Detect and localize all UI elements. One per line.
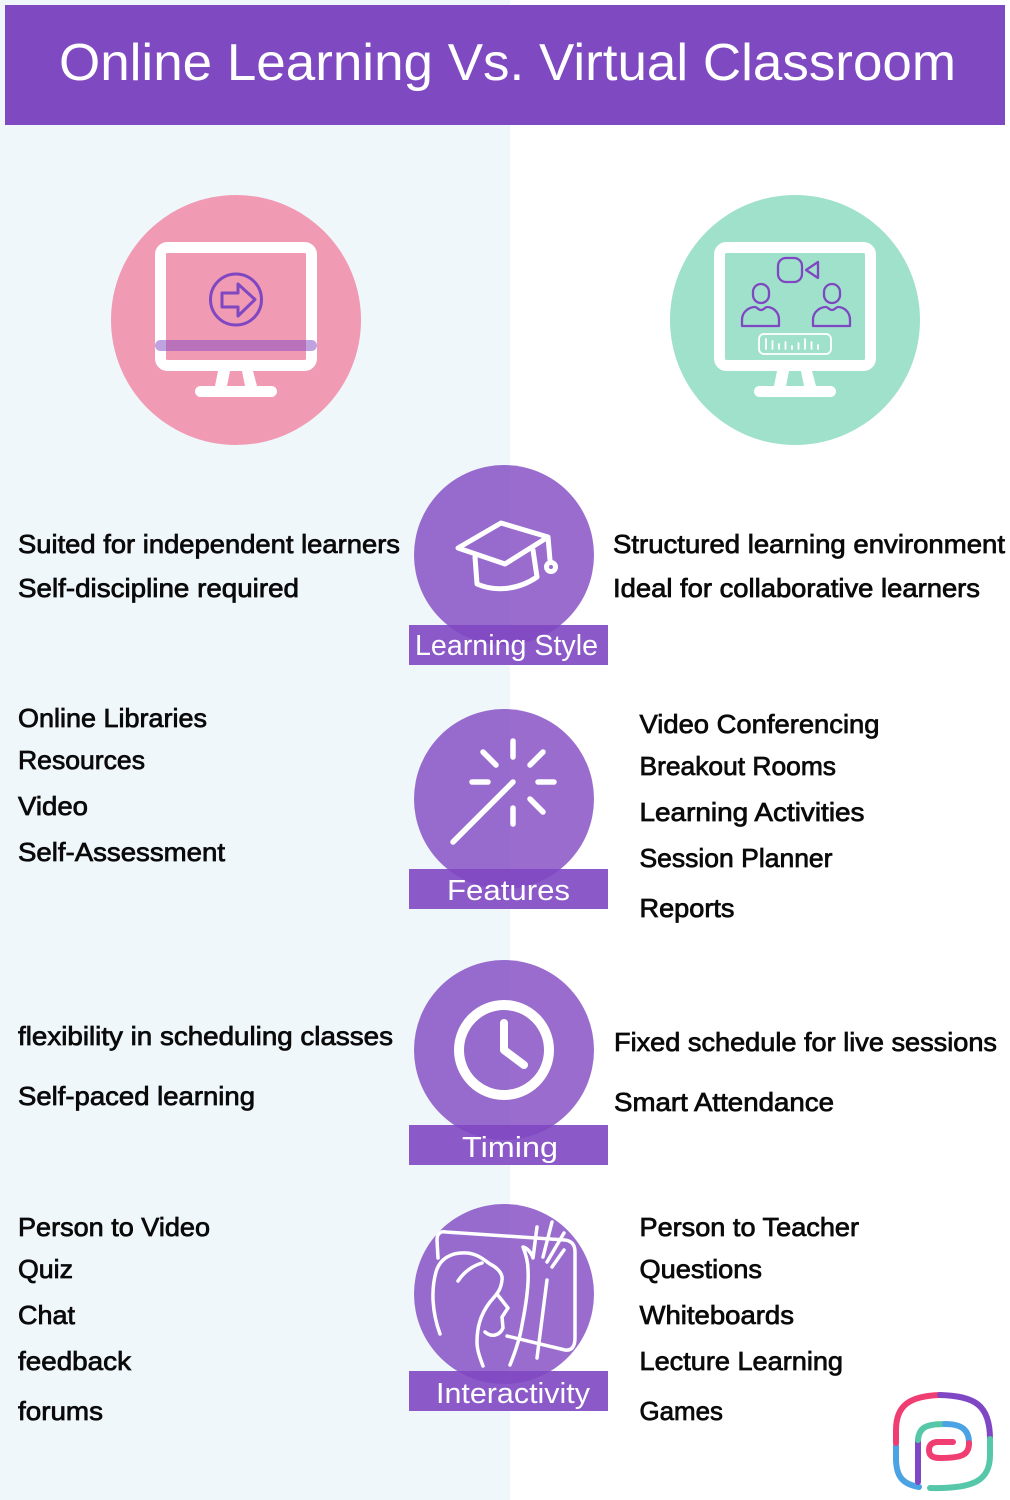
- logo: [896, 1395, 990, 1488]
- icon: person at whiteboard: [433, 1222, 575, 1366]
- row: interactivity left text: Person to Video: [18, 1212, 210, 1242]
- row: features right text: Session Planner: [640, 843, 833, 873]
- row: interactivity right text: Person to Teacher: [640, 1212, 859, 1242]
- row: timing right text: [614, 1027, 997, 1117]
- row: features right text: Learning Activities: [640, 797, 864, 827]
- row: learning style left text: [18, 529, 400, 603]
- icon: magic wand: [453, 741, 554, 842]
- row: interactivity right text: Questions: [640, 1254, 762, 1284]
- row: features right text: Breakout Rooms: [640, 751, 836, 781]
- title banner: [5, 5, 1005, 125]
- row: learning style left text: Suited for independent learners: [18, 529, 400, 559]
- title banner: Online Learning Vs. Virtual Classroom: [59, 34, 956, 92]
- row: learning style badge: Learning Style: [415, 630, 598, 662]
- row: features right text: Video Conferencing: [640, 709, 880, 739]
- row: interactivity right text: Lecture Learning: [640, 1346, 843, 1376]
- row: timing right text: Fixed schedule for live sessions: [614, 1027, 997, 1057]
- row: interactivity right text: Games: [640, 1396, 723, 1426]
- row: features right text: Reports: [640, 893, 734, 923]
- row: features left text: Online Libraries: [18, 703, 207, 733]
- row: learning style left text: Self-discipline required: [18, 573, 299, 603]
- row: learning style right text: Ideal for collaborative learners: [613, 573, 980, 603]
- row: timing right text: Smart Attendance: [614, 1087, 834, 1117]
- row: features badge: [409, 709, 608, 909]
- row: features left text: Resources: [18, 745, 145, 775]
- row: interactivity left text: Chat: [18, 1300, 76, 1330]
- row: interactivity left text: forums: [18, 1396, 103, 1426]
- row: interactivity badge: [409, 1204, 608, 1411]
- row: features left text: [18, 703, 226, 867]
- row: timing left text: [18, 1021, 393, 1111]
- icon: online learning monitor: [111, 195, 361, 445]
- row: interactivity badge: Interactivity: [436, 1378, 591, 1410]
- row: interactivity left text: feedback: [18, 1346, 132, 1376]
- row: timing badge: [409, 960, 608, 1165]
- row: interactivity left text: Quiz: [18, 1254, 73, 1284]
- row: interactivity right text: Whiteboards: [640, 1300, 794, 1330]
- row: interactivity left text: [18, 1212, 210, 1426]
- icon: virtual classroom monitor: [670, 195, 920, 445]
- row: timing left text: Self-paced learning: [18, 1081, 255, 1111]
- row: features badge: Features: [447, 875, 570, 907]
- row: features left text: Self-Assessment: [18, 837, 226, 867]
- row: learning style right text: Structured learning environment: [613, 529, 1006, 559]
- row: features right text: [640, 709, 880, 923]
- icon: graduation cap: [458, 523, 556, 589]
- row: timing left text: flexibility in scheduling classes: [18, 1021, 393, 1051]
- row: learning style badge: [409, 465, 608, 665]
- row: interactivity right text: [640, 1212, 859, 1426]
- row: timing badge: Timing: [462, 1132, 558, 1164]
- row: learning style right text: [613, 529, 1006, 603]
- icon: clock: [459, 1005, 549, 1095]
- row: features left text: Video: [18, 791, 88, 821]
